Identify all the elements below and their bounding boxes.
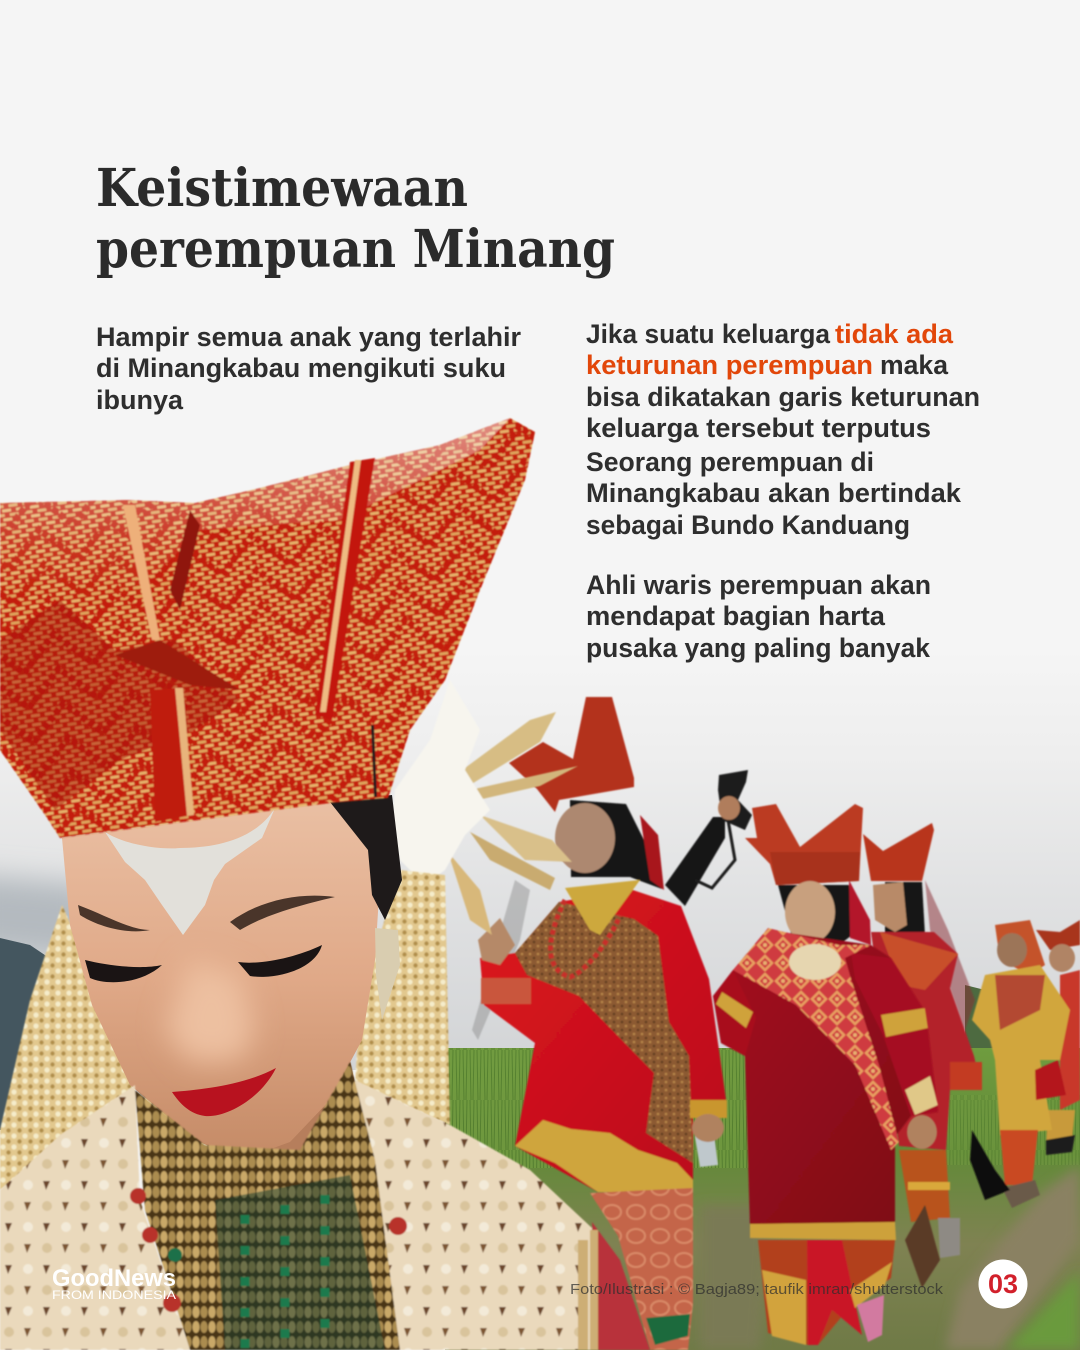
photo illustration: bride veil — [0, 870, 450, 1190]
dress silhouette — [713, 930, 938, 1236]
eyelashes right — [238, 945, 322, 977]
dress silhouette — [480, 889, 727, 1192]
text block: right paragraph one: keturunan perempuan — [586, 350, 873, 380]
sheen along the top edge — [0, 418, 510, 600]
logo: GoodNews from Indonesia: FROM INDONESIA — [52, 1290, 176, 1302]
skin — [62, 795, 385, 1160]
text block: right paragraph two: Minangkabau akan bertindak — [586, 478, 962, 508]
right sleeve — [851, 953, 938, 1116]
hijab — [778, 885, 856, 952]
knot folds — [170, 510, 200, 610]
cuff — [905, 1076, 938, 1115]
bottle — [693, 1118, 718, 1167]
eyebrow right — [230, 896, 335, 930]
photo illustration: bride face — [62, 795, 402, 1178]
photo illustration: third woman with crown — [863, 823, 982, 1258]
hand — [692, 1114, 724, 1142]
neck — [225, 1060, 365, 1178]
text block: right paragraph three: mendapat bagian harta — [586, 601, 886, 631]
text block: right paragraph one: tidak ada — [835, 319, 954, 349]
batik skirt — [590, 1188, 693, 1350]
crown — [745, 804, 863, 885]
hijab — [570, 800, 662, 889]
eyebrow left — [78, 905, 150, 931]
text block: right paragraph two: sebagai Bundo Kanduang — [586, 510, 910, 540]
neck gold — [565, 880, 640, 935]
photo credit: Foto/Ilustrasi : © Bagja89; taufik imran/shutterstock — [570, 1281, 944, 1298]
necklace — [789, 944, 841, 980]
photo illustration: hair flower and gold petals — [392, 680, 578, 935]
logo: GoodNews from Indonesia: GoodNews — [52, 1265, 176, 1292]
gold beaded necklace — [135, 1062, 400, 1350]
photo illustration: central woman — [671, 804, 940, 1345]
text block: right paragraph two: Seorang perempuan di — [586, 447, 874, 477]
text block: left paragraph: ibunya — [96, 385, 184, 415]
veil — [472, 880, 530, 1040]
red fold shadow — [0, 600, 240, 810]
text block: left paragraph: Hampir semua anak yang terlahir — [96, 322, 521, 352]
text block: right paragraph three: pusaka yang paling banyak — [586, 633, 931, 663]
earring — [375, 928, 400, 1020]
photo illustration: far right women — [970, 920, 1080, 1208]
cuff — [690, 1100, 727, 1118]
text block: left paragraph: di Minangkabau mengikuti suku — [96, 353, 506, 383]
skirt — [758, 1240, 895, 1345]
eyelashes left — [85, 960, 162, 982]
arm hand — [671, 1000, 705, 1030]
hem — [750, 1222, 896, 1240]
hands — [907, 1115, 937, 1149]
clutch bag — [905, 1205, 940, 1288]
text block: right paragraph one: maka — [880, 350, 949, 380]
sleeve band — [481, 978, 531, 1004]
face — [785, 881, 835, 943]
gold trim — [515, 1120, 693, 1192]
text block: right paragraph three: Ahli waris perempuan akan — [586, 570, 931, 600]
text block: left paragraph — [96, 322, 521, 415]
hands — [478, 918, 515, 965]
hem stripe — [646, 1314, 690, 1345]
photo illustration: bride headdress — [0, 418, 535, 838]
lips — [172, 1068, 276, 1116]
gold shawl — [515, 902, 693, 1163]
photo illustration: bride gown — [0, 1062, 650, 1350]
text block: right paragraph one — [586, 319, 980, 443]
nose shading — [165, 960, 255, 1062]
sleeve band left — [716, 992, 753, 1028]
necklace — [551, 900, 620, 977]
sleeve band right — [881, 1008, 928, 1037]
text block: right paragraph one: Jika suatu keluarga — [586, 319, 831, 349]
left arm — [713, 970, 756, 1056]
gown bead trim — [578, 1230, 598, 1350]
red beads — [130, 1188, 407, 1312]
text block: right paragraph two — [586, 447, 962, 540]
vertical band — [150, 688, 192, 822]
page number badge: 03 — [988, 1269, 1018, 1299]
headdress — [509, 697, 634, 812]
text block: right paragraph three — [586, 570, 931, 663]
hair — [330, 795, 402, 920]
shawl — [733, 928, 899, 1150]
black seam — [371, 725, 377, 797]
title — [96, 158, 615, 280]
photo illustration: landscape backdrop — [0, 650, 1080, 1350]
photo illustration: photographer arm with camera — [665, 770, 752, 906]
photo illustration: left walking woman — [472, 697, 727, 1350]
text block: right paragraph one: bisa dikatakan garis keturunan — [586, 382, 980, 412]
text block: right paragraph one: keluarga tersebut terputus — [586, 413, 931, 443]
title: perempuan Minang — [96, 219, 615, 280]
forehead jewellery — [105, 808, 275, 935]
page number badge — [978, 1260, 1028, 1308]
face — [555, 803, 615, 873]
title: Keistimewaan — [96, 158, 468, 219]
fold highlight stripes — [123, 505, 160, 640]
